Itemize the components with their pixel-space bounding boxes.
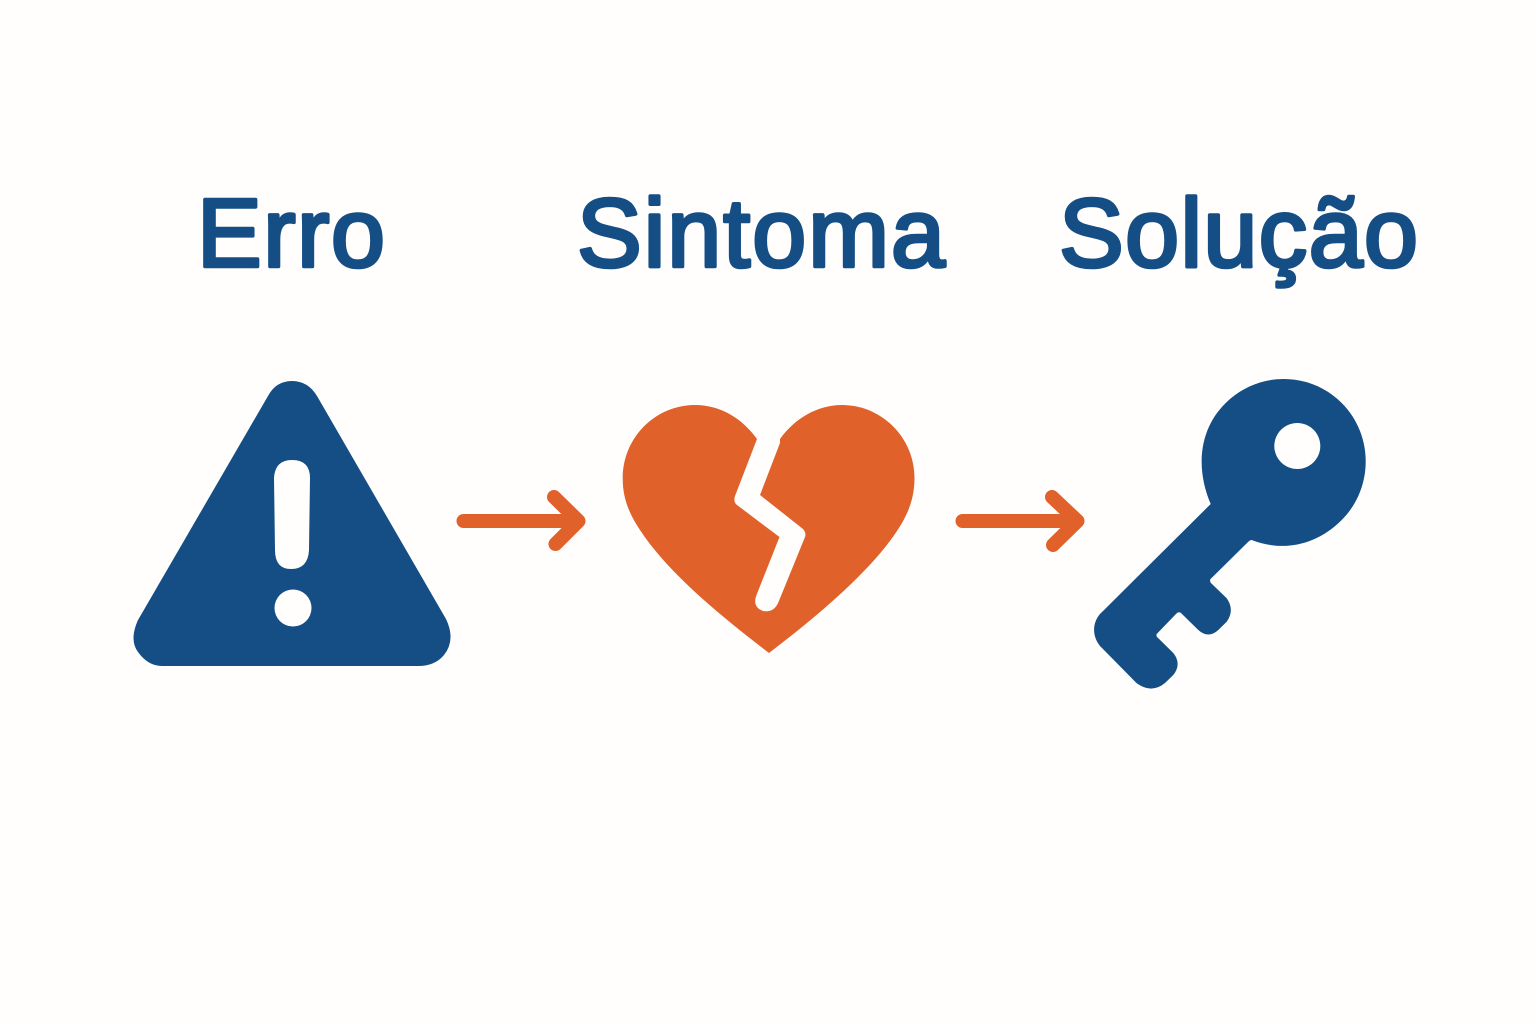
- icon: key: [1094, 379, 1366, 689]
- heading: Erro: Erro: [197, 178, 385, 288]
- arrow: sintoma to solução: [962, 497, 1078, 545]
- heading: Solução: Solução: [1059, 178, 1418, 288]
- heading: Sintoma: Sintoma: [577, 178, 945, 288]
- arrow: erro to sintoma: [464, 497, 578, 544]
- icon: warning triangle: [134, 381, 451, 666]
- icon: broken heart: [623, 405, 914, 653]
